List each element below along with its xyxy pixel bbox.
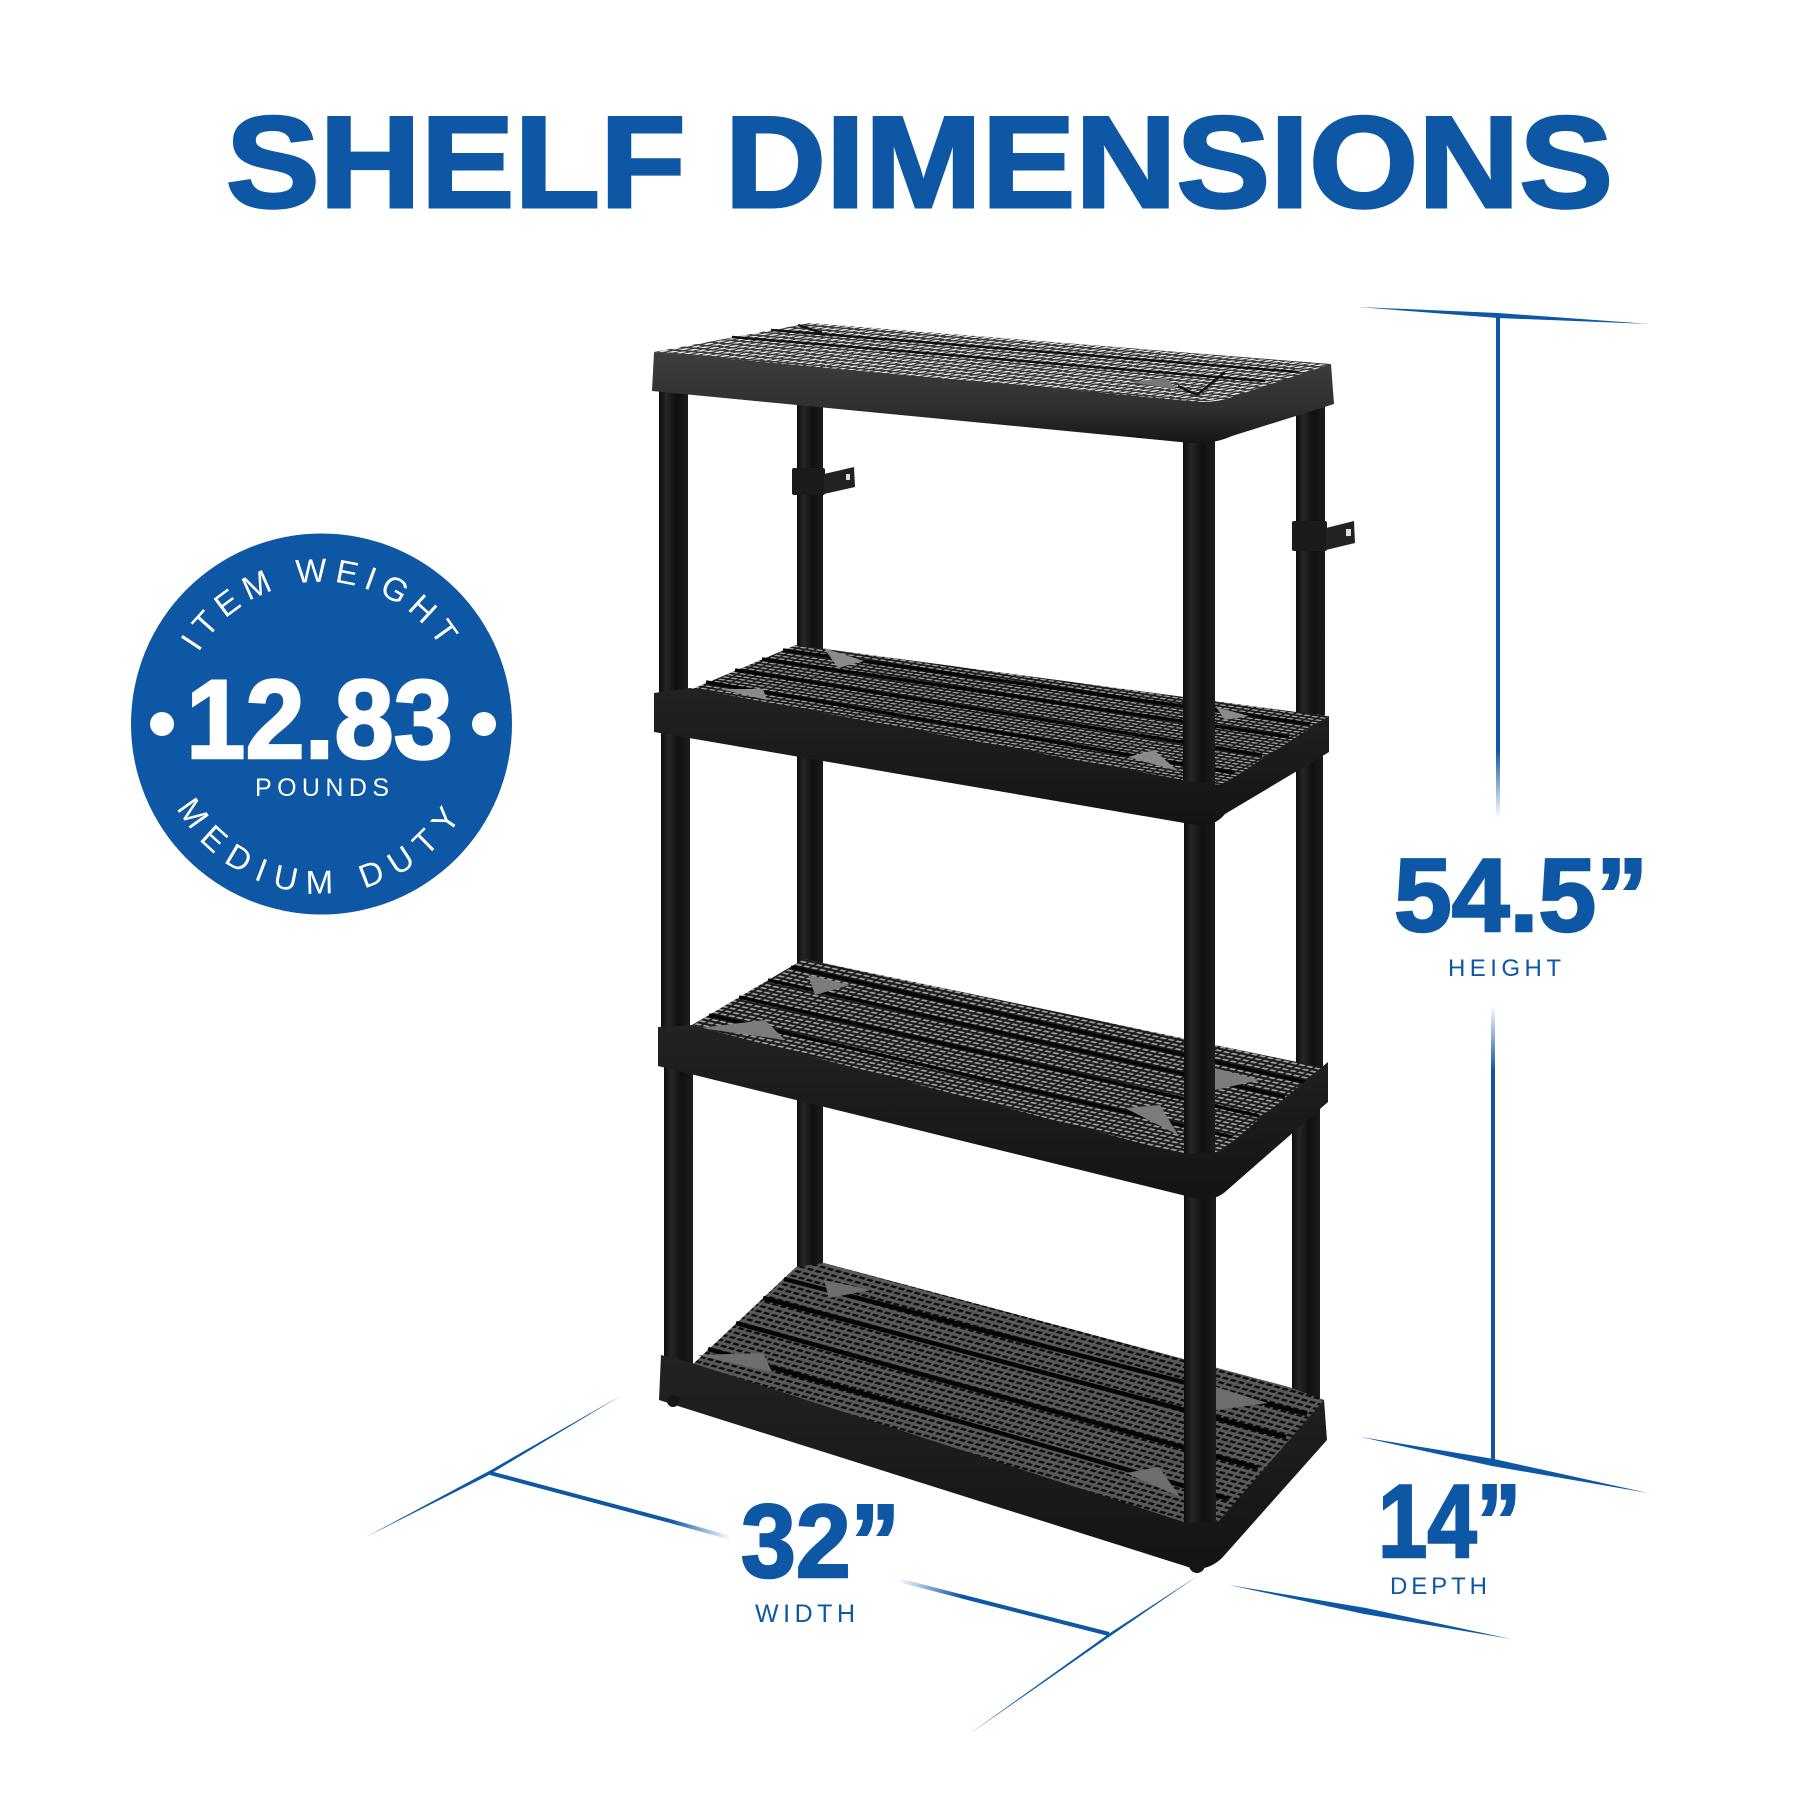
- badge arc label: medium duty: MEDIUM DUTY: [178, 798, 456, 894]
- width dimension lines: [366, 1395, 1199, 1735]
- badge: item weight: [131, 534, 512, 914]
- depth label: 14”: [1378, 1464, 1521, 1580]
- shelf 1 frame: [652, 352, 1334, 443]
- shelf unit: [652, 323, 1355, 1573]
- shelf 4 deck: [692, 1263, 1324, 1525]
- shelf 3 frame: [658, 1025, 1328, 1199]
- badge arc label: item weight: ITEM WEIGHT: [181, 558, 459, 650]
- wall bracket left: [792, 467, 855, 495]
- width caption: WIDTH: [755, 1600, 855, 1628]
- height caption: HEIGHT: [1448, 955, 1561, 982]
- shelf 4 frame: [659, 1355, 1327, 1569]
- shelf 2 frame: [654, 688, 1329, 825]
- title: SHELF DIMENSIONS: [226, 89, 1613, 235]
- width label: 32”: [741, 1484, 900, 1600]
- shelf 2 deck: [690, 645, 1329, 787]
- depth dimension line: [1229, 1585, 1511, 1639]
- badge dot right: [472, 712, 496, 736]
- depth caption: DEPTH: [1390, 1573, 1487, 1600]
- shelf 1 deck: [654, 323, 1331, 403]
- badge unit: POUNDS: [255, 774, 389, 802]
- height dimension line: [1358, 307, 1650, 1493]
- feet: [667, 1395, 1205, 1573]
- front posts: [659, 385, 1216, 1530]
- wall bracket right: [1292, 521, 1355, 551]
- back posts: [797, 400, 1325, 1410]
- badge weight value: 12.83: [186, 657, 453, 782]
- height label: 54.5”: [1394, 838, 1648, 954]
- shelf 3 deck: [692, 959, 1328, 1158]
- badge dot left: [150, 712, 174, 736]
